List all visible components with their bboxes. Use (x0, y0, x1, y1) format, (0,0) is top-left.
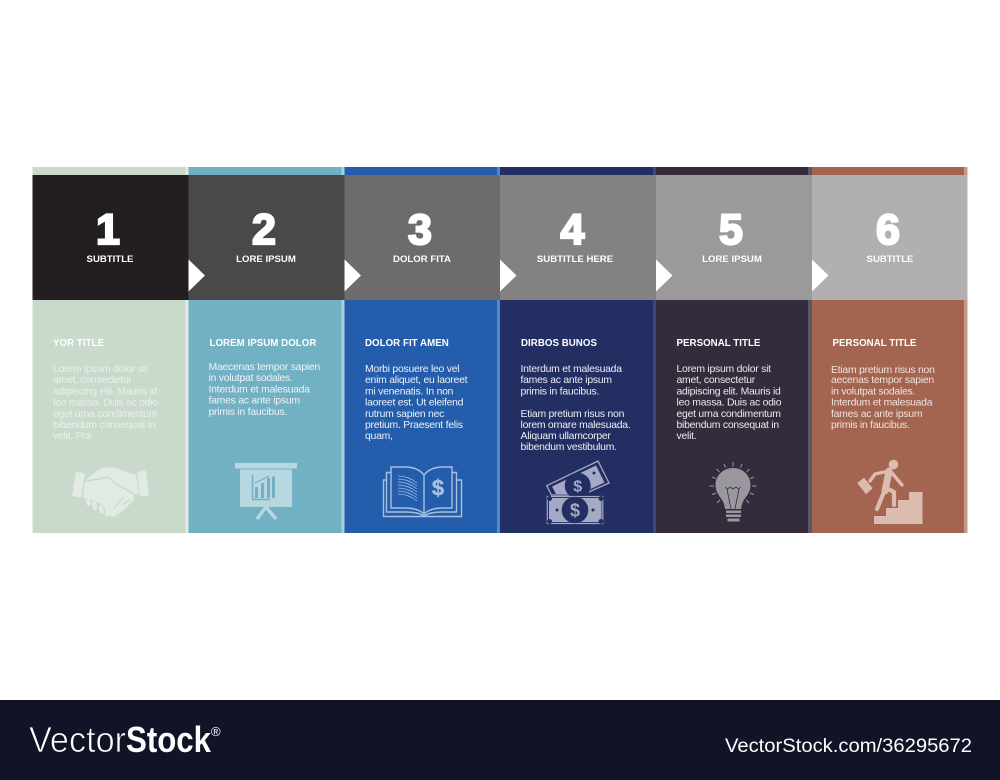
panel 5 title: PERSONAL TITLE (676, 338, 761, 349)
step 5 header (656, 175, 812, 300)
panel 5 body text: eget urna condimentum (676, 409, 781, 420)
arrow 2 to 3 (344, 260, 361, 292)
icon: presentation board (235, 463, 297, 519)
arrow 3 to 4 (500, 260, 516, 292)
panel 5 body text: bibendum consequat in (676, 420, 779, 431)
step 5 number: 5 (719, 206, 743, 254)
panel 5 body text (676, 364, 782, 442)
panel 2 body text (208, 362, 320, 418)
panel 4 body text (520, 364, 630, 453)
panel 3 body text (365, 364, 468, 442)
step 6 header (812, 175, 968, 300)
icon: open book: $ (432, 476, 444, 500)
step 4 number: 4 (561, 206, 585, 254)
step 2 header (188, 175, 344, 300)
footer url: VectorStock.com/36295672 (725, 736, 972, 757)
panel 1 body text: adipiscing elit. Mauris id (53, 386, 158, 398)
panel 1 body text: leo massa. Duis ac odio (53, 398, 158, 408)
panel 1: yor title (32, 167, 188, 533)
icon: money bills: $ (570, 500, 580, 520)
step 4 header (500, 175, 656, 300)
panel 1 body text: bibendum consequat in (53, 420, 156, 431)
icon: handshake (72, 467, 149, 517)
panel 2 body text: fames ac ante ipsum (208, 396, 300, 406)
panel 3 body text: rutrum sapien nec (365, 409, 444, 420)
panel 3 body text: Morbi posuere leo vel (365, 364, 459, 375)
panel 1 title: YOR TITLE (53, 338, 105, 349)
panel 1 body text: amet, consectetur (53, 375, 132, 386)
panel 6 body text: in volutpat sodales. (831, 386, 915, 398)
step 1 number: 1 (96, 206, 120, 254)
panel 1 body text: Lorem ipsum dolor sit (53, 364, 148, 375)
panel 4 title: DIRBOS BUNOS (521, 338, 597, 349)
icon: open book (384, 467, 462, 516)
step 6 subtitle: SUBTITLE (867, 254, 914, 265)
panel 6: personal title (812, 167, 968, 533)
panel 2 body text: Maecenas tempor sapien (208, 362, 320, 373)
panel 4 body text: fames ac ante ipsum (520, 375, 612, 386)
panel 3 body text: quam, (365, 431, 393, 442)
panel 1 body text: eget urna condimentum (53, 409, 157, 420)
panel 5 body text: leo massa. Duis ac odio (676, 398, 782, 408)
panel 4 body text: lorem ornare malesuada. (520, 420, 630, 431)
panel 5 body text: amet, consectetur (676, 375, 756, 386)
panel 6 body text: Etiam pretium risus non (831, 365, 935, 376)
step 3 header (344, 175, 500, 300)
step 3 subtitle: DOLOR FITA (393, 254, 451, 265)
panel 2 body text: in volutpat sodales. (208, 373, 293, 384)
footer logo (29, 719, 221, 760)
step 2 subtitle: LORE IPSUM (236, 254, 296, 265)
panel 3 body text: enim aliquet, eu laoreet (365, 375, 468, 386)
panel 5: personal title (656, 167, 812, 533)
step 4 subtitle: SUBTITLE HERE (537, 254, 614, 265)
panel 3 body text: mi venenatis. In non (365, 386, 454, 398)
step 3 number: 3 (408, 206, 432, 254)
arrow 1 to 2 (188, 260, 205, 292)
arrow 4 to 5 (656, 260, 672, 292)
panel 4 body text: Aliquam ullamcorper (520, 431, 611, 442)
panel 3: dolor fit amen (344, 167, 500, 533)
footer logo: Stock (126, 719, 212, 760)
panel 6 body text: aecenas tempor sapien (831, 375, 934, 386)
panel 3 title: DOLOR FIT AMEN (365, 338, 449, 349)
step 6 number: 6 (876, 206, 900, 254)
panel 6 body text (831, 365, 935, 431)
panel 3 body text: pretium. Praesent felis (365, 420, 463, 431)
panel 6 body text: fames ac ante ipsum (831, 409, 922, 420)
icon: money bills (547, 461, 609, 524)
step 2 number: 2 (252, 206, 276, 254)
panel 2 title: LOREM IPSUM DOLOR (210, 338, 316, 349)
panel 2 body text: Interdum et malesuada (208, 384, 310, 396)
panel 1 body text (53, 364, 158, 442)
step 1 header (32, 175, 188, 300)
panel 4 body text: Interdum et malesuada (520, 364, 622, 375)
panel 2: lorem ipsum dolor (188, 167, 344, 533)
panel 4 body text: Etiam pretium risus non (520, 409, 625, 420)
panel 3 body text: laoreet est. Ut eleifend (365, 398, 464, 408)
icon: money bills: $ (573, 478, 582, 496)
arrow 5 to 6 (812, 260, 828, 292)
panel 1 body text: velit. Pra (53, 431, 91, 442)
icon: climbing stairs (857, 460, 922, 524)
panel 4: dirbos bunos (500, 167, 656, 533)
footer logo: ® (211, 724, 221, 739)
panel 6 title: PERSONAL TITLE (832, 338, 917, 349)
panel 6 body text: primis in faucibus. (831, 420, 910, 431)
step 5 subtitle: LORE IPSUM (702, 254, 762, 265)
panel 5 body text: adipiscing elit. Mauris id (676, 386, 781, 398)
panel 6 body text: Interdum et malesuada (831, 398, 933, 408)
panel 4 body text: primis in faucibus. (520, 386, 599, 398)
panel 4 body text: bibendum vestibulum. (520, 442, 617, 453)
panel 2 body text: primis in faucibus. (208, 407, 287, 418)
panel 5 body text: velit. (676, 431, 696, 442)
panel 5 body text: Lorem ipsum dolor sit (676, 364, 771, 375)
icon: light bulb (710, 462, 756, 522)
step 1 subtitle: SUBTITLE (87, 254, 134, 265)
footer logo: Vector (29, 719, 126, 760)
footer bar (0, 700, 1000, 780)
